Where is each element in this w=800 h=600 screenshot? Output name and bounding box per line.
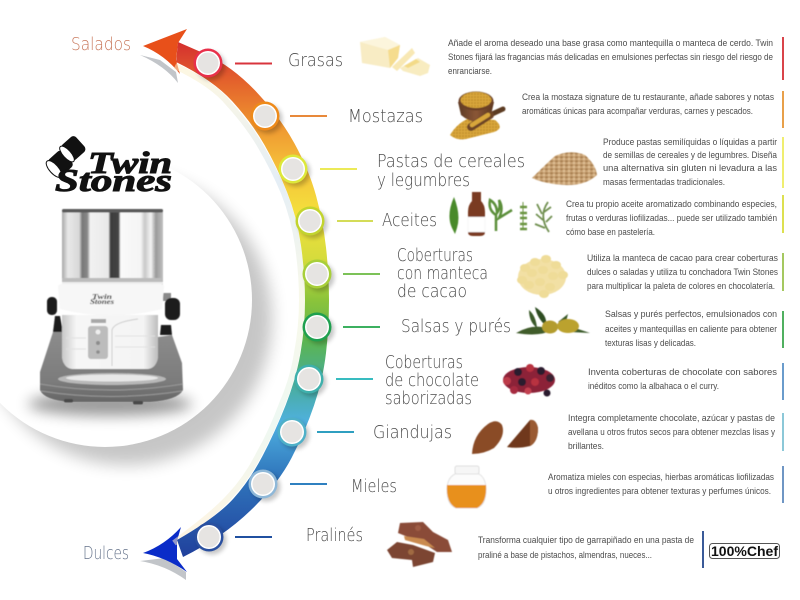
text: Aceites: Crea tu propio aceite aromatizado combinando especies, (566, 199, 777, 209)
text: Pralinés: Transforma cualquier tipo de garrapiñado en una pasta de (478, 535, 694, 545)
text: Salsas: aceites y mantequillas en caliente para obtener (605, 324, 777, 334)
product: Twin Stones mixer: Stones (90, 298, 114, 306)
mixer knobs (47, 297, 57, 315)
text: Aceites: cómo base en pastelería. (566, 227, 655, 237)
nodes (194, 48, 334, 554)
label: Coberturas con manteca de cacao (397, 245, 488, 302)
icon: pralines (387, 522, 452, 567)
label: Coberturas de chocolate saborizadas (385, 352, 479, 409)
arc inner halo (174, 66, 302, 543)
label: Salsas y purés: Salsas y purés (401, 316, 511, 337)
label: Mieles: Mieles (351, 476, 397, 497)
text: Grasas: Añade el aroma deseado una base grasa como mantequilla o manteca de cerdo. Twin (448, 38, 773, 48)
text: Mostazas: Crea la mostaza signature de tu restaurante, añade sabores y notas (522, 92, 774, 102)
label: Coberturas de chocolate saborizadas: de chocolate (385, 370, 479, 391)
mixer small logo: Twin (92, 293, 112, 301)
icon: olives (516, 307, 590, 334)
label: Aceites: Aceites (382, 210, 437, 231)
spectrum arc (176, 42, 329, 557)
text: Giandujas (568, 413, 775, 451)
mixer body (62, 315, 158, 369)
text: Mieles: Aromatiza mieles con especias, hierbas aromáticas liofilizadas (548, 472, 774, 482)
text: Saborizadas (588, 367, 778, 391)
text: Manteca de cacao: dulces o saladas y utiliza tu conchadora Twin Stones (587, 267, 778, 277)
node: Saborizadas (294, 364, 326, 396)
text: Grasas: enranciarse. (448, 66, 492, 76)
icon: dried berries (503, 364, 555, 396)
text: Manteca de cacao: Utiliza la manteca de cacao para crear coberturas (587, 253, 778, 263)
text: Aceites (566, 199, 777, 237)
icon: butter (360, 37, 430, 76)
label: Pastas de cereales y legumbres: y legumbres (377, 170, 470, 191)
label: Pastas de cereales y legumbres: Pastas de cereales (377, 151, 525, 172)
mixer bowl (62, 212, 163, 280)
logo: Twin Stones: Stones (55, 162, 172, 198)
text: Mieles (548, 472, 774, 496)
text: Pastas: Produce pastas semilíquidas o líquidas a partir (603, 137, 777, 147)
label: Coberturas con manteca de cacao: de cacao (397, 281, 467, 302)
text: Manteca de cacao (587, 253, 778, 291)
text: Giandujas: brillantes. (568, 441, 604, 451)
icon: mustard seeds (450, 92, 503, 139)
side bars (702, 37, 784, 568)
text: Salsas: texturas lisas y delicadas. (605, 338, 696, 348)
mixer arms (53, 316, 63, 332)
text: Manteca de cacao: para multiplicar la paleta de colores en chocolatería. (587, 281, 775, 291)
label: Mostazas: Mostazas (348, 106, 423, 127)
connector lines (235, 64, 380, 537)
text: Pastas: masas fermentadas tradicionales. (603, 177, 725, 187)
text: Pastas: de semillas de cereales y de legumbres. Diseña (603, 150, 777, 160)
label: Pralinés: Pralinés (306, 525, 363, 546)
node: Aceites (296, 206, 328, 238)
label: Salados: Salados (71, 34, 131, 55)
text: Saborizadas: inéditos como la albahaca o el curry. (588, 381, 719, 391)
icon: cocoa butter buttons (517, 255, 568, 298)
text: Aceites: frutas o verduras liofilizadas... puede ser utilizado también (566, 213, 777, 223)
panel: product disc (0, 153, 272, 465)
label: Pastas de cereales y legumbres (377, 151, 525, 191)
label: Grasas: Grasas (288, 50, 343, 71)
icon: honey jar (447, 466, 486, 508)
icon: grain pile (532, 152, 597, 185)
text: Pastas (603, 137, 778, 187)
node: Grasas (194, 48, 226, 80)
node: Pastas (278, 154, 310, 186)
node: Mieles (248, 470, 280, 502)
label: Coberturas con manteca de cacao: Coberturas (397, 245, 473, 266)
mixer ground shadow (28, 392, 192, 416)
node: Mostazas (250, 102, 282, 134)
text: Mostazas (522, 92, 774, 116)
label: Coberturas de chocolate saborizadas: Coberturas (385, 352, 463, 373)
arrow shadow: bottom (140, 558, 186, 580)
arrow head: Salados (143, 29, 187, 74)
label: Coberturas con manteca de cacao: con manteca (397, 263, 488, 284)
text: Giandujas: avellana u otros frutos secos para obtener mezclas lisas y (568, 427, 775, 437)
icon: oil bottle and herbs (449, 192, 552, 236)
arrow head: Dulces (143, 527, 187, 572)
arrow shadow: top (140, 55, 178, 83)
text: Salsas (605, 309, 777, 348)
label: Dulces: Dulces (83, 543, 129, 564)
text: Giandujas: Integra completamente chocolate, azúcar y pastas de (568, 413, 775, 423)
text: Pastas: una alternativa sin gluten ni levadura a las (603, 163, 778, 173)
icon: gianduja chocolates (472, 420, 538, 454)
node: Pralinés (194, 522, 226, 554)
text: Pralinés: praliné a base de pistachos, almendras, nueces... (478, 550, 652, 560)
label: Giandujas: Giandujas (373, 422, 452, 443)
node: Giandujas (278, 418, 310, 450)
text: Mostazas: aromáticas únicas para acompañar verduras, carnes y pescados. (522, 106, 753, 116)
text: Saborizadas: Inventa coberturas de chocolate con sabores (588, 367, 778, 377)
logo: Twin Stones (44, 135, 172, 198)
node: Salsas (302, 312, 334, 344)
badge: 100%Chef: 100%Chef (711, 543, 778, 559)
label: Coberturas de chocolate saborizadas: saborizadas (385, 388, 472, 409)
node: Manteca (302, 260, 334, 292)
mixer base (40, 332, 183, 402)
text: Grasas (448, 38, 773, 76)
product: Twin Stones mixer (28, 209, 192, 416)
text: Pralinés (478, 535, 694, 560)
text: Mieles: u otros ingredientes para obtener texturas y perfumes únicos. (548, 486, 771, 496)
logo: Twin Stones: Twin (88, 145, 172, 180)
text: Salsas: Salsas y purés perfectos, emulsionados con (605, 309, 777, 319)
mixer control panel (88, 326, 108, 359)
